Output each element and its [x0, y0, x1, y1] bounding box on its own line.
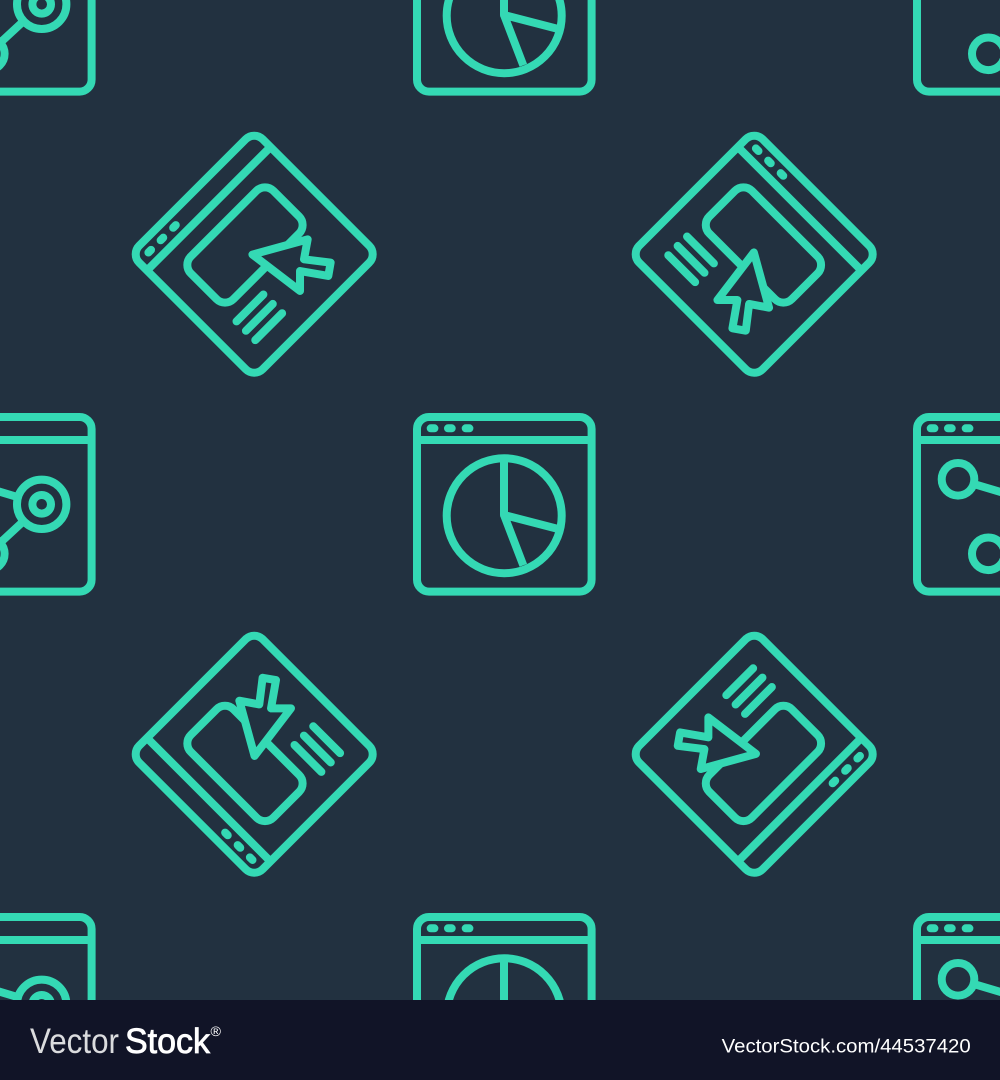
- icon: share window bottom right: [917, 917, 1000, 1080]
- icon: share window middle left: [0, 417, 92, 592]
- icon: click window rotated, upper left: [131, 131, 378, 378]
- logo: VectorStock: [30, 1022, 222, 1061]
- footer band: [0, 1000, 1000, 1080]
- icon: share window top right: [917, 0, 1000, 92]
- icon: share window top left: [0, 0, 92, 92]
- image id text: VectorStock.com/44537420: [722, 1037, 971, 1058]
- icon: pie chart window top: [417, 0, 592, 92]
- logo: VectorStock: Stock: [125, 1022, 210, 1061]
- icon: pie chart window centre: [417, 417, 592, 592]
- icon: share window bottom left: [0, 917, 92, 1080]
- icon: click window rotated, lower right: [631, 631, 878, 878]
- logo: VectorStock: Vector: [30, 1022, 119, 1061]
- icon: click window rotated, lower left: [131, 631, 378, 878]
- icon: share window middle right: [917, 417, 1000, 592]
- icon: click window rotated, upper right: [631, 131, 878, 378]
- logo: VectorStock: ®: [210, 1023, 222, 1039]
- icon: pie chart window bottom: [417, 917, 592, 1080]
